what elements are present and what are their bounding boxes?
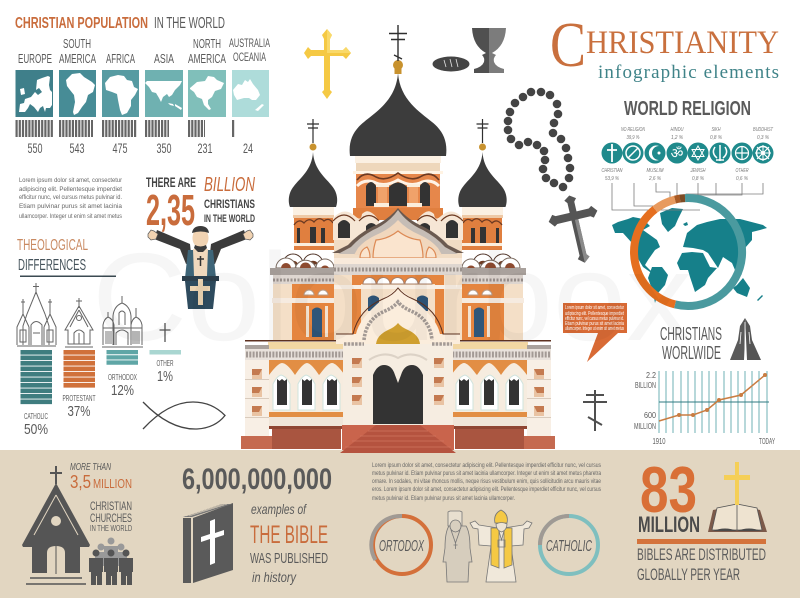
text: examples of the bible [250,501,328,585]
heading: christians worlwide [660,324,722,363]
title: christianity infographic elements: HRISTIANITY [586,25,779,61]
bar: other [150,350,181,385]
text block: intro [19,177,123,220]
line chart: christians worldwide: TODAY [759,436,775,446]
icon: orthodox priest [443,511,472,582]
bar: orthodox: ORTHODOX [108,373,137,382]
heading: theological differences [17,237,116,277]
stat: 83 million: 83 [640,453,697,526]
continent labels: SOUTH [63,36,91,51]
text block: intro: ullamcorper. Integer ut enim sit amet metus [19,213,123,220]
heading: theological differences: THEOLOGICAL [17,237,88,254]
badge: catholic [540,516,598,574]
badge: ortodox: ORTODOX [379,538,425,555]
population numbers: 350 [156,140,172,156]
bar: catholic: CATHOLIC [24,412,48,421]
watermark: Colourbox [92,228,692,367]
central porch with door [336,288,460,453]
icon: orthodox cross [583,390,607,431]
callout: speech bubble: efficitur nunc, vel cursus metus pulvinar id. [565,316,624,322]
text block: bottom paragraph: metus pulvinar id. Etiam pulvinar purus sit amet lacinia ullamcorper. Integer ut enim sit amet metus pharetra [372,470,601,477]
callout: speech bubble: Lorem ipsum dolor sit amet, consectetur [565,305,624,311]
heading: world religion: WORLD RELIGION [624,98,751,120]
heading: christian population: IN THE WORLD [154,15,225,32]
world map [612,208,767,303]
continent labels: OCEANIA [233,50,266,64]
bar: orthodox [108,350,137,399]
religion labels: BUDDHIST [753,127,773,133]
religion labels: SIKH [712,127,721,133]
callout: 2,35 billion christians: CHRISTIANS [204,197,255,211]
central upper block [334,264,462,341]
map tile: asia [145,70,183,117]
text: 3,5 million churches: MORE THAN [70,462,112,473]
continent labels: AUSTRALIA [229,36,270,50]
icon: closed bible [183,503,233,583]
icon: chalice [472,28,506,73]
religion labels: CHRISTIAN [602,168,623,174]
title: christianity infographic elements: C [550,9,586,80]
text block: bottom paragraph: eros. Lorem ipsum dolor sit amet, consectetur adipiscing elit. Pellentesque imperdiet efficitur nunc, vel cursus [372,486,602,493]
icon: pope [470,510,532,582]
population bars [16,120,234,137]
religion labels: 0,3 % [757,135,769,141]
continent labels: NORTH [193,36,221,51]
text: bibles distributed [637,545,766,584]
bar: protestant [62,350,96,420]
right small dome cluster [462,254,520,268]
map tile: south america [59,70,96,117]
religion labels: 1,2 % [671,135,683,141]
map tile: north america [188,70,226,117]
icon: group of people [89,538,133,585]
map tile: oceania [232,70,269,117]
panel: 83 million bibles [637,453,767,584]
religion symbol circles: ॐ [671,146,684,162]
bar: orthodox: 12% [111,382,134,399]
religion labels: MUSLIM [646,168,664,174]
donut ring [634,198,742,306]
line chart: christians worldwide: MILLION [634,421,656,431]
line chart: christians worldwide: 600 [644,410,656,420]
upper arches row [333,211,379,240]
text block: intro: Etiam pulvinar purus sit amet lacinia [19,203,122,210]
title: christianity infographic elements [550,9,779,83]
heading: christians worlwide: WORLWIDE [662,343,721,363]
title: christianity infographic elements: infographic elements [598,62,779,83]
religion labels: JEWISH [690,168,706,174]
line chart: christians worldwide: 2.2 [646,370,656,380]
population numbers [28,140,253,156]
text: examples of the bible: in history [252,569,297,585]
religion labels: 0,6 % [736,176,748,182]
population numbers: 543 [70,140,85,156]
icon: praying hands [730,318,761,360]
central upper gable [332,208,464,264]
text block: intro: Lorem ipsum dolor sit amet, consectetur [19,177,123,184]
religion labels: 2,6 % [648,176,661,182]
callout: 2,35 billion christians: IN THE WORLD [204,213,255,225]
icon: protestant church outline [65,298,93,347]
bar: catholic [24,350,48,438]
text: 3,5 million churches: 3,5 [70,472,91,492]
mirrored upper arches [417,211,463,240]
icon: open bible with cross [708,462,767,532]
continent labels: AMERICA [188,51,226,66]
callout: 2,35 billion christians: THERE ARE [146,174,196,190]
left dome with cross [289,119,337,207]
religion symbol circles [602,142,774,164]
icon: ichthys fish [143,402,225,429]
right upper block [461,268,526,341]
text: 3,5 million churches: CHURCHES [90,511,132,525]
callout: 2,35 billion christians [146,174,255,235]
left upper block [270,268,335,341]
text block: bottom paragraph: metus pulvinar id. Etiam pulvinar purus sit amet lacinia ullamcorper. [372,495,515,502]
main dome with cross [350,25,446,156]
line chart: christians worldwide: 1910 [652,436,666,446]
icon: small cross [160,323,170,342]
stat: 83 million: MILLION [638,512,700,537]
icon: dark church [22,466,90,584]
icon: orthodox church outline [102,296,143,347]
leader lines [612,183,763,210]
text: examples of the bible: WAS PUBLISHED [250,550,328,567]
religion labels: 53,9 % [605,176,619,182]
line chart: christians worldwide: BILLION [635,380,656,390]
callout: speech bubble: Etiam pulvinar purus sit amet lacinia [565,321,624,327]
text block: bottom paragraph: ornare. In sodales, mi vitae rhoncus mollis, neque risus vestibulum enim, quis sollicitudin arcu mauris vitae [372,478,601,485]
panel: bible published [182,463,332,585]
text block: bottom paragraph: Lorem ipsum dolor sit amet, consectetur adipiscing elit. Pellentesque imperdiet efficitur nunc, vel cursus [372,462,602,469]
text block: bottom paragraph [372,462,602,502]
text: examples of the bible: examples of [251,501,308,517]
religion labels: 39,9 % [626,135,640,141]
bar: catholic: 50% [24,421,48,438]
left small dome cluster [276,254,334,268]
continent labels: AMERICA [59,51,96,66]
callout: 2,35 billion christians: 2,35 [146,186,195,235]
central drum [353,156,443,220]
religion labels: 0,8 % [710,135,722,141]
right tower drum [462,207,503,250]
panel: world religion [602,98,774,306]
religion labels: OTHER [736,168,749,174]
population numbers: 550 [28,140,43,156]
text: 3,5 million churches: CHRISTIAN [90,499,132,513]
religion labels: HINDU [670,127,684,133]
population numbers: 475 [112,140,128,156]
icon: preaching priest [148,226,253,309]
bar: other: OTHER [156,359,174,368]
right dome with cross [458,119,507,207]
text: 3,5 million churches [70,462,132,533]
callout: speech bubble: ullamcorper. Integer ut enim sit amet metus [565,326,624,332]
heading: 6,000,000,000: 6,000,000,000 [182,463,332,496]
continent labels [18,36,270,66]
heading: christian population: CHRISTIAN POPULATION [15,15,148,32]
heading: christians worlwide: CHRISTIANS [660,324,722,344]
icon: gold cross [304,29,351,99]
panel: christian population [15,15,270,156]
icon: grey rosary cross [544,190,608,269]
right lower wing [452,340,555,449]
continent labels: EUROPE [18,51,52,66]
text: 3,5 million churches: IN THE WORLD [90,524,132,533]
divider bar [637,539,766,544]
callout: speech bubble [563,303,627,362]
callout: speech bubble: adipiscing elit. Pellentesque imperdiet [565,311,624,317]
religion labels: NO RELIGION [621,127,645,133]
line chart: christians worldwide [634,370,775,446]
illustration: cathedral [241,25,555,453]
bar: other: 1% [157,368,173,385]
religion labels [602,127,773,182]
religion labels: 0,8 % [692,176,704,182]
panel: theological differences [17,237,181,438]
text: 3,5 million churches: MILLION [93,476,132,491]
continent labels: AFRICA [106,51,135,66]
text block: intro: adipiscing elit. Pellentesque imperdiet [19,186,122,193]
bar: protestant: 37% [68,403,90,420]
callout: 2,35 billion christians: BILLION [204,174,255,196]
badge: ortodox [371,516,431,574]
text: examples of the bible: THE BIBLE [250,521,328,549]
icon: bread [432,56,470,72]
beige bottom band [0,450,800,598]
bar: protestant: PROTESTANT [62,394,96,403]
left lower wing [241,340,344,449]
badge: catholic: CATHOLIC [546,538,592,555]
side tower drums [293,207,334,250]
icon: catholic church outline [17,283,56,346]
panel: churches in the world [22,462,133,585]
continent labels: ASIA [154,51,174,66]
heading: theological differences: DIFFERENCES [18,257,86,274]
icon: rosary [504,88,574,191]
population numbers: 231 [198,140,213,156]
map tile: africa [102,70,139,117]
map tile: europe [16,70,53,117]
text block: intro: efficitur nunc, vel cursus metus pulvinar id. [19,194,122,201]
population numbers: 24 [243,140,253,156]
